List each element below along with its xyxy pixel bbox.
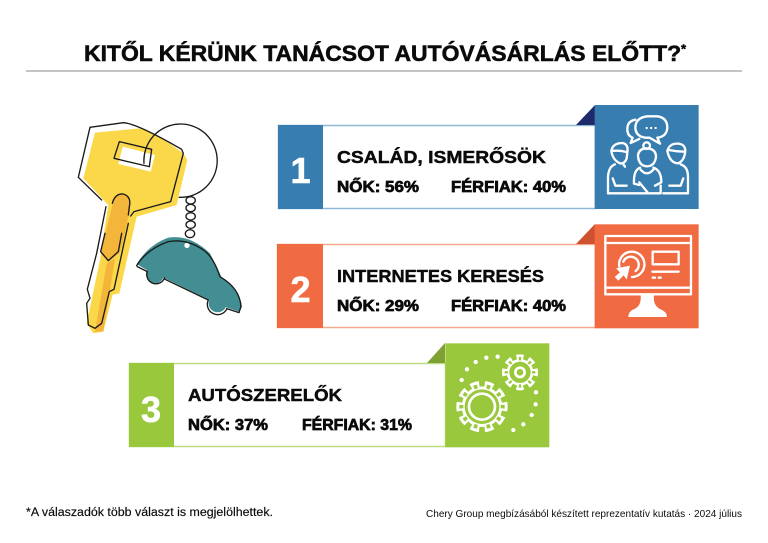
- number block 1: [278, 125, 323, 209]
- footnote: *A válaszadók több választ is megjelölhettek.: [26, 507, 273, 519]
- ring: [144, 124, 217, 197]
- fold 2: [576, 224, 595, 244]
- fold 1: [576, 105, 595, 125]
- illustration: keys with car keychain: [78, 123, 242, 333]
- fold 3: [427, 343, 445, 363]
- stats 2: FÉRFIAK: 40%: [451, 298, 566, 315]
- small gear: [505, 358, 535, 387]
- middle person: [643, 142, 650, 149]
- heading 2: INTERNETES KERESÉS: [337, 265, 544, 286]
- number block 3: 3: [141, 389, 161, 430]
- stats 1: NŐK: 56%: [337, 178, 419, 196]
- left person: [611, 143, 628, 163]
- icon panel: people talking: [595, 105, 699, 209]
- key blade: [101, 194, 130, 262]
- panel: card 2 internet: [277, 224, 699, 328]
- heading 1: CSALÁD, ISMERŐSÖK: [337, 146, 546, 167]
- icon panel: gears: [445, 343, 549, 447]
- title: KITŐL KÉRÜNK TANÁCSOT AUTÓVÁSÁRLÁS ELŐTT?: [84, 41, 657, 66]
- panel: card 3 mechanics: [129, 343, 549, 447]
- number block 1: 1: [290, 150, 311, 191]
- source note: Chery Group megbízásából készített reprezentatív kutatás · 2024 július: [426, 508, 742, 520]
- number block 2: 2: [290, 269, 311, 310]
- stats 3: FÉRFIAK: 31%: [302, 417, 412, 434]
- number block 2: [277, 244, 323, 328]
- big gear: [460, 385, 504, 428]
- dots: [459, 354, 538, 432]
- stats 3: [188, 416, 412, 434]
- key fill: [83, 128, 187, 333]
- stats 2: NŐK: 29%: [337, 297, 419, 315]
- right person: [667, 144, 685, 163]
- car: [137, 237, 242, 312]
- stats 2: [337, 297, 566, 315]
- icon panel: monitor with cursor: [595, 224, 699, 328]
- panel: card 1 family: [278, 105, 699, 209]
- number block 3: [129, 363, 174, 447]
- stats 1: FÉRFIAK: 40%: [451, 179, 566, 196]
- stats 3: NŐK: 37%: [188, 416, 268, 434]
- heading 3: AUTÓSZERELŐK: [188, 384, 342, 405]
- stats 1: [337, 178, 566, 196]
- title: *: [681, 42, 686, 56]
- key outline: [78, 123, 183, 328]
- key chain: [183, 197, 195, 247]
